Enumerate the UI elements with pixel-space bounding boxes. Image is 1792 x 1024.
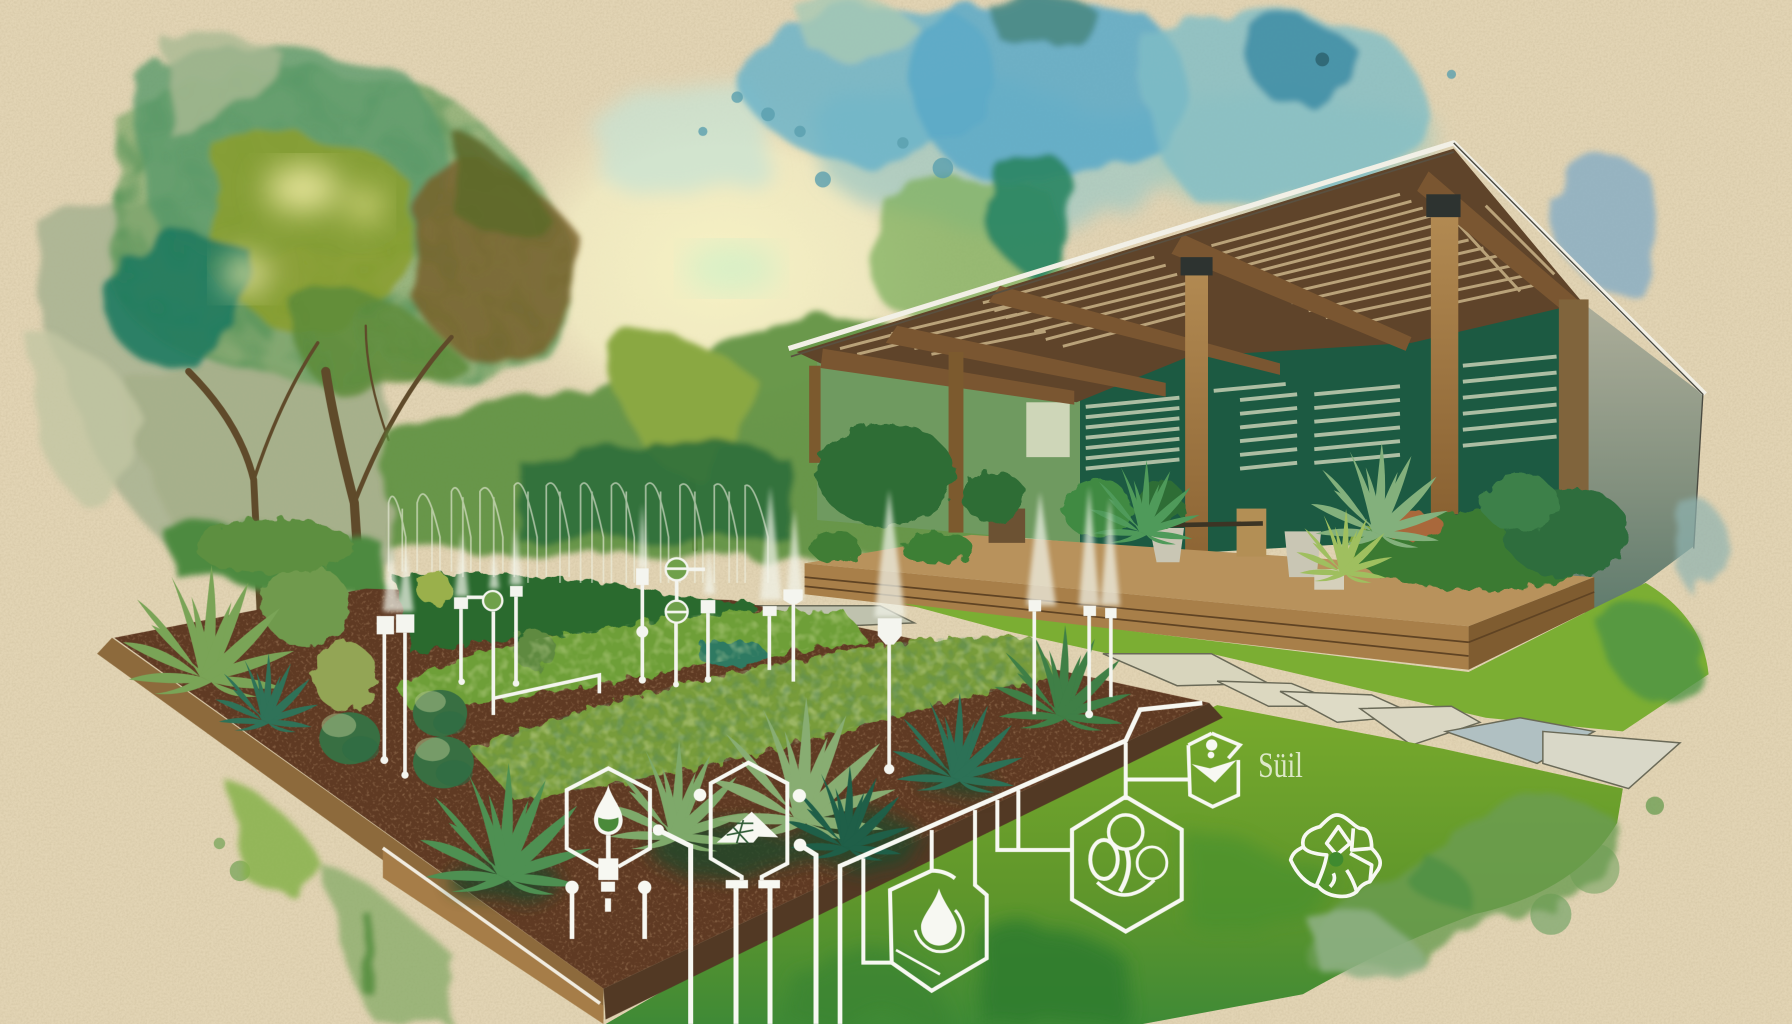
sprinkler stakes: [377, 558, 1117, 779]
background treeline: [171, 311, 1006, 594]
patio foliage: [809, 423, 1629, 590]
garden bed: [97, 589, 1223, 1024]
slatted screens: [1086, 357, 1557, 469]
watercolor clouds: [583, 0, 1657, 331]
soil label: Süil: [1258, 745, 1303, 785]
icon: soil hexagon: [1188, 733, 1240, 807]
background sprinkler field: [389, 483, 768, 583]
wooden deck: [805, 535, 1594, 626]
view through left opening: [817, 357, 1080, 543]
mulch soil: [114, 589, 1209, 989]
main trunk wire: [840, 703, 1202, 1024]
glowing sky: [457, 69, 983, 469]
upper right connector wires: [1126, 743, 1189, 800]
wooden edging left: [97, 638, 603, 1019]
stepping stone path: [714, 606, 1680, 789]
wooden edging right: [603, 703, 1223, 1019]
icon: nutrient hexagon: [1072, 797, 1182, 931]
icon: succulent plant: [1291, 815, 1380, 896]
water sprays: [383, 486, 1120, 617]
wooden columns: [809, 215, 1589, 579]
sprinkler stake right group: [878, 600, 1117, 774]
white roof edge: [789, 143, 1705, 394]
branch wires: [997, 790, 1073, 850]
main lawn: [606, 705, 1623, 1024]
roof beams: [821, 171, 1577, 405]
upper lawn: [903, 501, 1726, 731]
round shrubs: [319, 690, 474, 788]
side wall: [1560, 286, 1703, 623]
icon: water drop sensor hexagon: [565, 768, 651, 939]
watercolor washes lower right: [1303, 789, 1623, 982]
plant shadows: [446, 767, 992, 901]
white circuit lines and hexagon icons: [565, 703, 1202, 1024]
large trees canopy: [32, 37, 584, 560]
patio furniture and planters: [989, 509, 1344, 590]
paint splatter dots: [214, 53, 1664, 935]
pergola building: [789, 143, 1705, 670]
watercolor washes lower left: [234, 789, 457, 1024]
pale window: [1026, 402, 1070, 457]
garden plant rows: [194, 519, 1057, 800]
wire to first hexagon: [653, 824, 691, 1024]
slatted roof underside: [797, 149, 1583, 402]
spiky plants: [123, 565, 1131, 895]
wire to greenhouse: [794, 839, 816, 1024]
icon: greenhouse hexagon: [694, 763, 806, 1024]
interior dark wall: [1074, 291, 1563, 560]
tree trunks: [189, 326, 731, 640]
icon: water droplet hexagon: [863, 810, 987, 991]
column brackets: [1181, 194, 1461, 275]
